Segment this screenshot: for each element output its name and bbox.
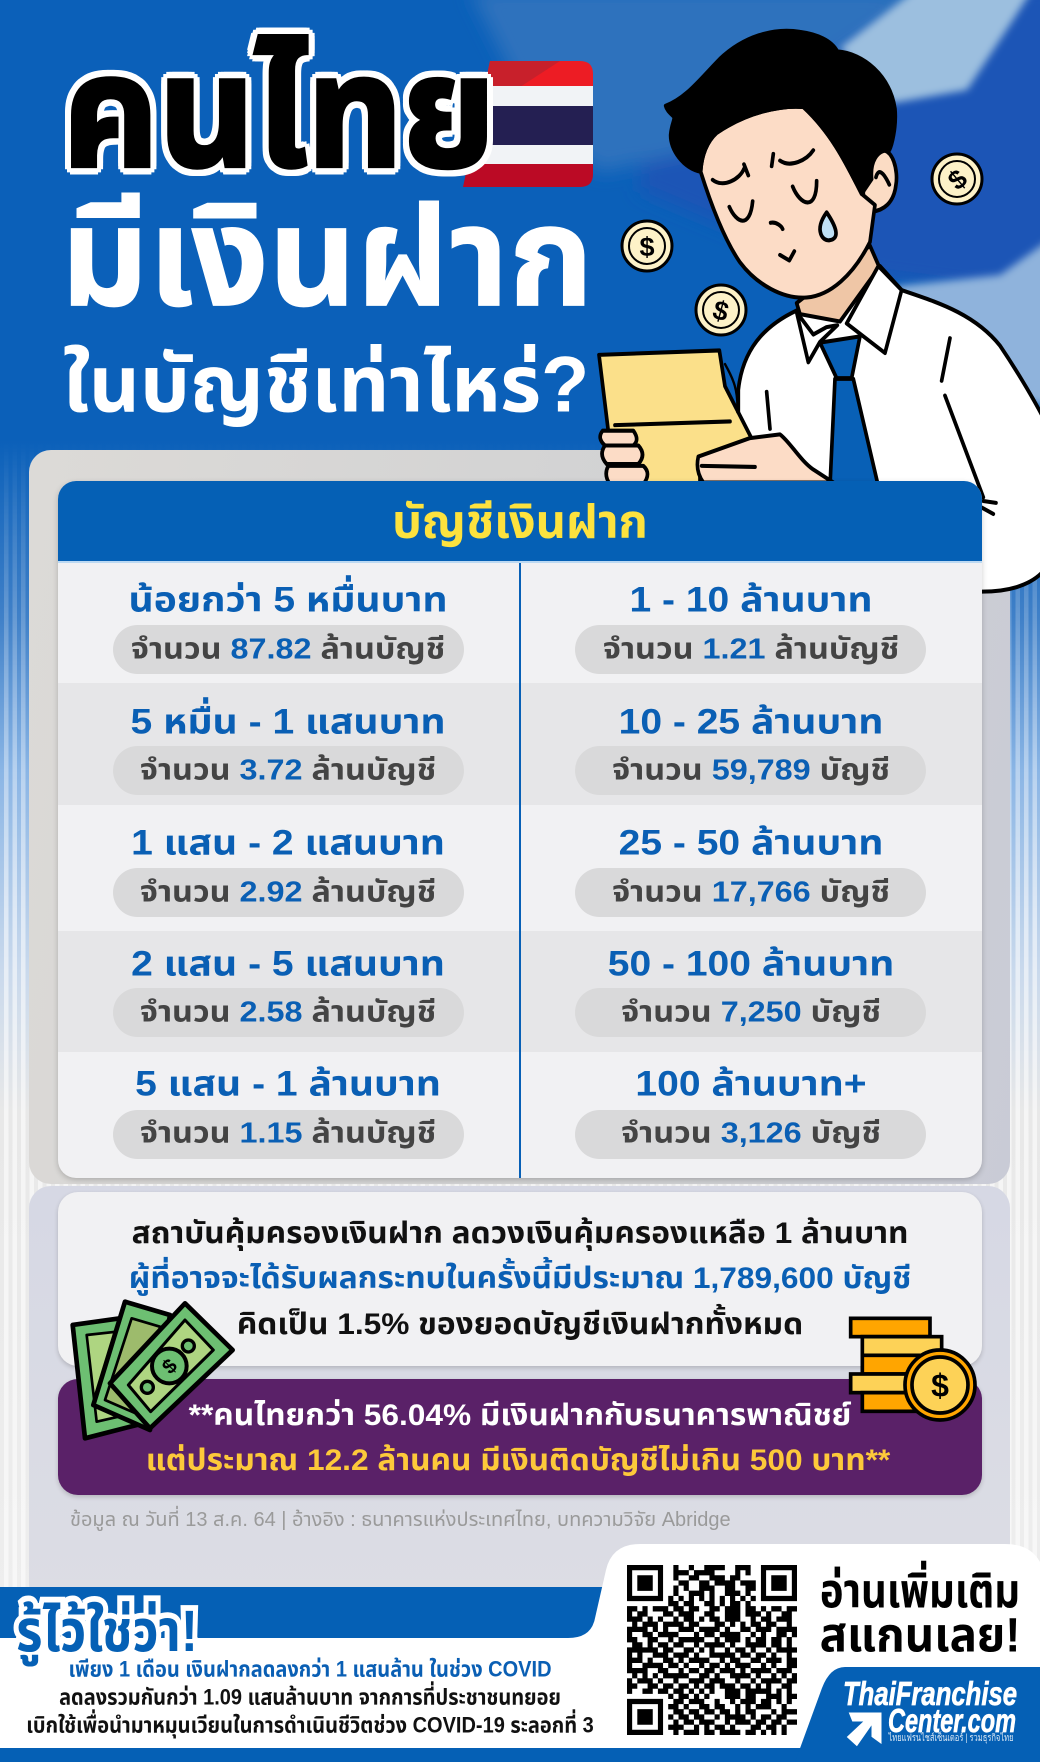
icon: coin stack: $	[931, 1368, 949, 1404]
icon: coin right: $	[942, 163, 973, 196]
cell: under 50k: จำนวน 87.82 ล้านบัญชี	[131, 634, 445, 666]
callout line 1: **คนไทยกว่า 56.04% มีเงินฝากกับธนาคารพาณิชย์	[189, 1399, 851, 1432]
panel: purple callout	[58, 1379, 982, 1495]
table heading: บัญชีเงินฝาก	[392, 495, 648, 548]
cell: 10-25M: จำนวน 59,789 บัญชี	[612, 754, 890, 786]
QR code	[627, 1565, 797, 1735]
icon: coin middle	[696, 285, 746, 335]
cell: 200k-500k	[113, 944, 464, 1037]
cell: 100M+: 100 ล้านบาท+	[635, 1064, 867, 1104]
cell: 500k-1M	[113, 1064, 464, 1159]
cell: 10-25M: 10 - 25 ล้านบาท	[619, 702, 883, 742]
panel: deposit protection info	[58, 1192, 982, 1366]
title line 3: ในบัญชีเท่าไหร่?	[63, 340, 589, 428]
cell: 25-50M	[575, 824, 926, 917]
cell: 50-100M: 50 - 100 ล้านบาท	[608, 944, 894, 984]
cell: 10-25M	[575, 702, 926, 795]
cell: 500k-1M: จำนวน 1.15 ล้านบัญชี	[140, 1118, 436, 1150]
side stripes	[0, 440, 1040, 1620]
icon: coin left: $	[639, 232, 655, 262]
cell: 1-10M: 1 - 10 ล้านบาท	[629, 580, 873, 620]
note line 3: เบิกใช้เพื่อนำมาหมุนเวียนในการดำเนินชีวิตช่วง COVID-19 ระลอกที่ 3	[26, 1714, 594, 1738]
icon: coin right	[932, 154, 982, 204]
read more call to action: อ่านเพิ่มเติม	[820, 1566, 1020, 1618]
cell: 100k-200k	[113, 824, 464, 917]
cell: 100k-200k: 1 แสน - 2 แสนบาท	[131, 824, 445, 862]
row band 2	[58, 683, 982, 805]
icon: Thai flag	[463, 61, 593, 187]
cell: 50-100M	[575, 944, 926, 1037]
panel: upper backing	[29, 450, 1010, 1184]
info line 3: คิดเป็น 1.5% ของยอดบัญชีเงินฝากทั้งหมด	[237, 1308, 803, 1341]
cell: 50k-100k	[113, 697, 464, 795]
cell: under 50k: น้อยกว่า 5 หมื่นบาท	[129, 580, 447, 620]
icon: coin left	[622, 221, 672, 271]
note line 2: ลดลงรวมกันกว่า 1.09 แสนล้านบาท จากการที่ประชาชนทยอย	[59, 1686, 561, 1710]
cell: 200k-500k: 2 แสน - 5 แสนบาท	[131, 944, 445, 984]
cell: 200k-500k: จำนวน 2.58 ล้านบัญชี	[140, 996, 436, 1028]
character: stressed office worker	[597, 28, 1040, 594]
bottom blue bar	[0, 1748, 1040, 1762]
cell: 50k-100k: จำนวน 3.72 ล้านบัญชี	[140, 754, 436, 786]
bottom white area	[0, 1638, 1040, 1748]
source note: ข้อมูล ณ วันที่ 13 ส.ค. 64 | อ้างอิง : ธนาคารแห่งประเทศไทย, บทความวิจัย Abridge	[70, 1509, 731, 1531]
title line 2: มีเงินฝาก	[61, 179, 593, 335]
read more call to action	[820, 1560, 1020, 1662]
callout line 2: แต่ประมาณ 12.2 ล้านคน มีเงินติดบัญชีไม่เกิน 500 บาท**	[146, 1444, 890, 1477]
read more call to action: สแกนเลย!	[820, 1610, 1020, 1662]
cell: 100M+	[575, 1064, 926, 1159]
cell: 500k-1M: 5 แสน - 1 ล้านบาท	[135, 1064, 441, 1104]
column divider	[519, 563, 521, 1178]
icon: coin middle: $	[710, 295, 732, 327]
cell: under 50k	[113, 575, 464, 674]
row band 4	[58, 931, 982, 1052]
cell: 1-10M	[575, 580, 926, 674]
cell: 100M+: จำนวน 3,126 บัญชี	[621, 1118, 881, 1150]
cell: 100k-200k: จำนวน 2.92 ล้านบัญชี	[140, 876, 436, 908]
cell: 25-50M: 25 - 50 ล้านบาท	[619, 824, 883, 862]
cell: 50-100M: จำนวน 7,250 บัญชี	[621, 996, 881, 1028]
panel: deposit account table	[58, 481, 982, 1178]
cell: 25-50M: จำนวน 17,766 บัญชี	[612, 876, 890, 908]
background flag waves	[470, 0, 1040, 408]
cell: 1-10M: จำนวน 1.21 ล้านบัญชี	[603, 634, 899, 666]
cell: 50k-100k: 5 หมื่น - 1 แสนบาท	[131, 702, 445, 742]
info line 2: ผู้ที่อาจจะได้รับผลกระทบในครั้งนี้มีประมาณ 1,789,600 บัญชี	[129, 1262, 911, 1295]
icon: banknotes: $	[158, 1354, 182, 1379]
white corner behind band	[560, 1620, 620, 1640]
panel: lower backing	[29, 1186, 1010, 1606]
heading: did you know: รู้ไว้ใช่ว่า!	[16, 1598, 198, 1664]
title line 1: คนไทย	[63, 24, 495, 200]
note line 1: เพียง 1 เดือน เงินฝากลดลงกว่า 1 แสนล้าน ในช่วง COVID	[68, 1658, 552, 1682]
table heading	[58, 481, 982, 563]
info line 1: สถาบันคุ้มครองเงินฝาก ลดวงเงินคุ้มครองแหลือ 1 ล้านบาท	[132, 1217, 908, 1250]
